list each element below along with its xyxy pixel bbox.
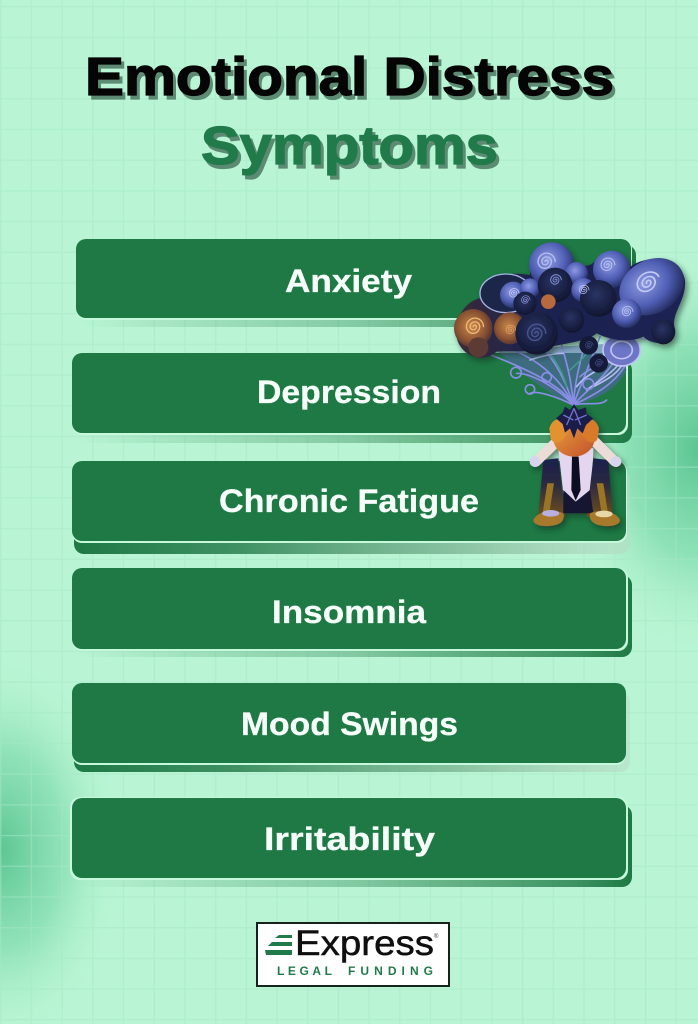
label: Depression: Depression bbox=[257, 374, 441, 410]
panel: Irritability bbox=[70, 797, 632, 887]
title bbox=[85, 47, 614, 176]
wordmark: Express bbox=[295, 924, 434, 963]
title line: Symptoms: Symptoms bbox=[201, 116, 498, 176]
title line: Emotional Distress: Emotional Distress bbox=[85, 47, 614, 107]
icon: thought wisps bbox=[487, 317, 654, 405]
icon: logo stripes bbox=[265, 935, 292, 955]
panel: Anxiety bbox=[76, 239, 636, 327]
label: Irritability: Irritability bbox=[264, 821, 435, 857]
panel: Insomnia bbox=[72, 568, 632, 657]
icon: swirling cloud bbox=[454, 242, 694, 358]
label: Insomnia: Insomnia bbox=[272, 594, 426, 630]
label: Mood Swings: Mood Swings bbox=[241, 706, 458, 742]
panel: Chronic Fatigue bbox=[72, 461, 630, 554]
panel: Mood Swings bbox=[72, 683, 630, 772]
tagline left: LEGAL bbox=[277, 964, 332, 978]
registered mark: ® bbox=[434, 933, 439, 940]
logo: Express Legal Funding bbox=[257, 923, 449, 986]
swirls on cloud bbox=[466, 253, 662, 340]
illustration: person with storm cloud bbox=[454, 242, 694, 526]
label: Chronic Fatigue: Chronic Fatigue bbox=[219, 483, 479, 519]
tagline right: FUNDING bbox=[348, 964, 433, 978]
icon: sitting person bbox=[530, 404, 621, 526]
label: Anxiety: Anxiety bbox=[285, 263, 412, 299]
panel: Depression bbox=[72, 353, 632, 443]
